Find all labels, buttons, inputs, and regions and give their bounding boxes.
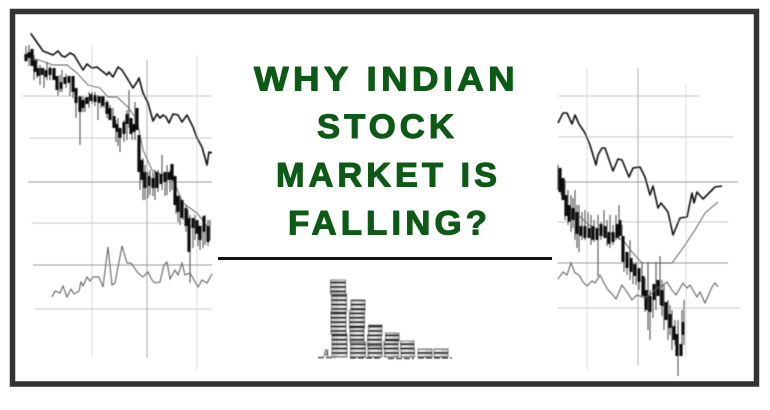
title: MARKET IS	[276, 156, 501, 194]
chart: left falling stock chart	[22, 33, 212, 370]
coin stack 1	[330, 280, 347, 357]
icon: declining coin stacks	[318, 280, 452, 358]
left price line	[31, 33, 212, 165]
coin stack 4	[384, 333, 399, 357]
right lower indicator line	[558, 263, 718, 303]
title	[254, 60, 519, 242]
coin stack 3	[368, 325, 382, 357]
title: WHY INDIAN	[254, 60, 519, 98]
coin stack 6	[418, 349, 432, 357]
chart: right falling stock chart	[558, 68, 740, 376]
left candle bodies	[26, 49, 208, 252]
right price line	[558, 113, 722, 235]
left candle wicks	[26, 45, 210, 283]
divider line	[218, 257, 552, 260]
coin stack 5	[400, 341, 414, 357]
left lower indicator line	[52, 246, 212, 297]
coin stack 7	[434, 349, 448, 357]
right candle wicks	[558, 165, 684, 376]
right moving average	[623, 202, 718, 263]
title: STOCK	[317, 108, 458, 146]
left moving average	[33, 58, 210, 230]
coin stack 2	[350, 300, 366, 357]
right candle bodies	[560, 168, 683, 356]
ground	[318, 358, 452, 359]
title: FALLING?	[288, 204, 491, 242]
